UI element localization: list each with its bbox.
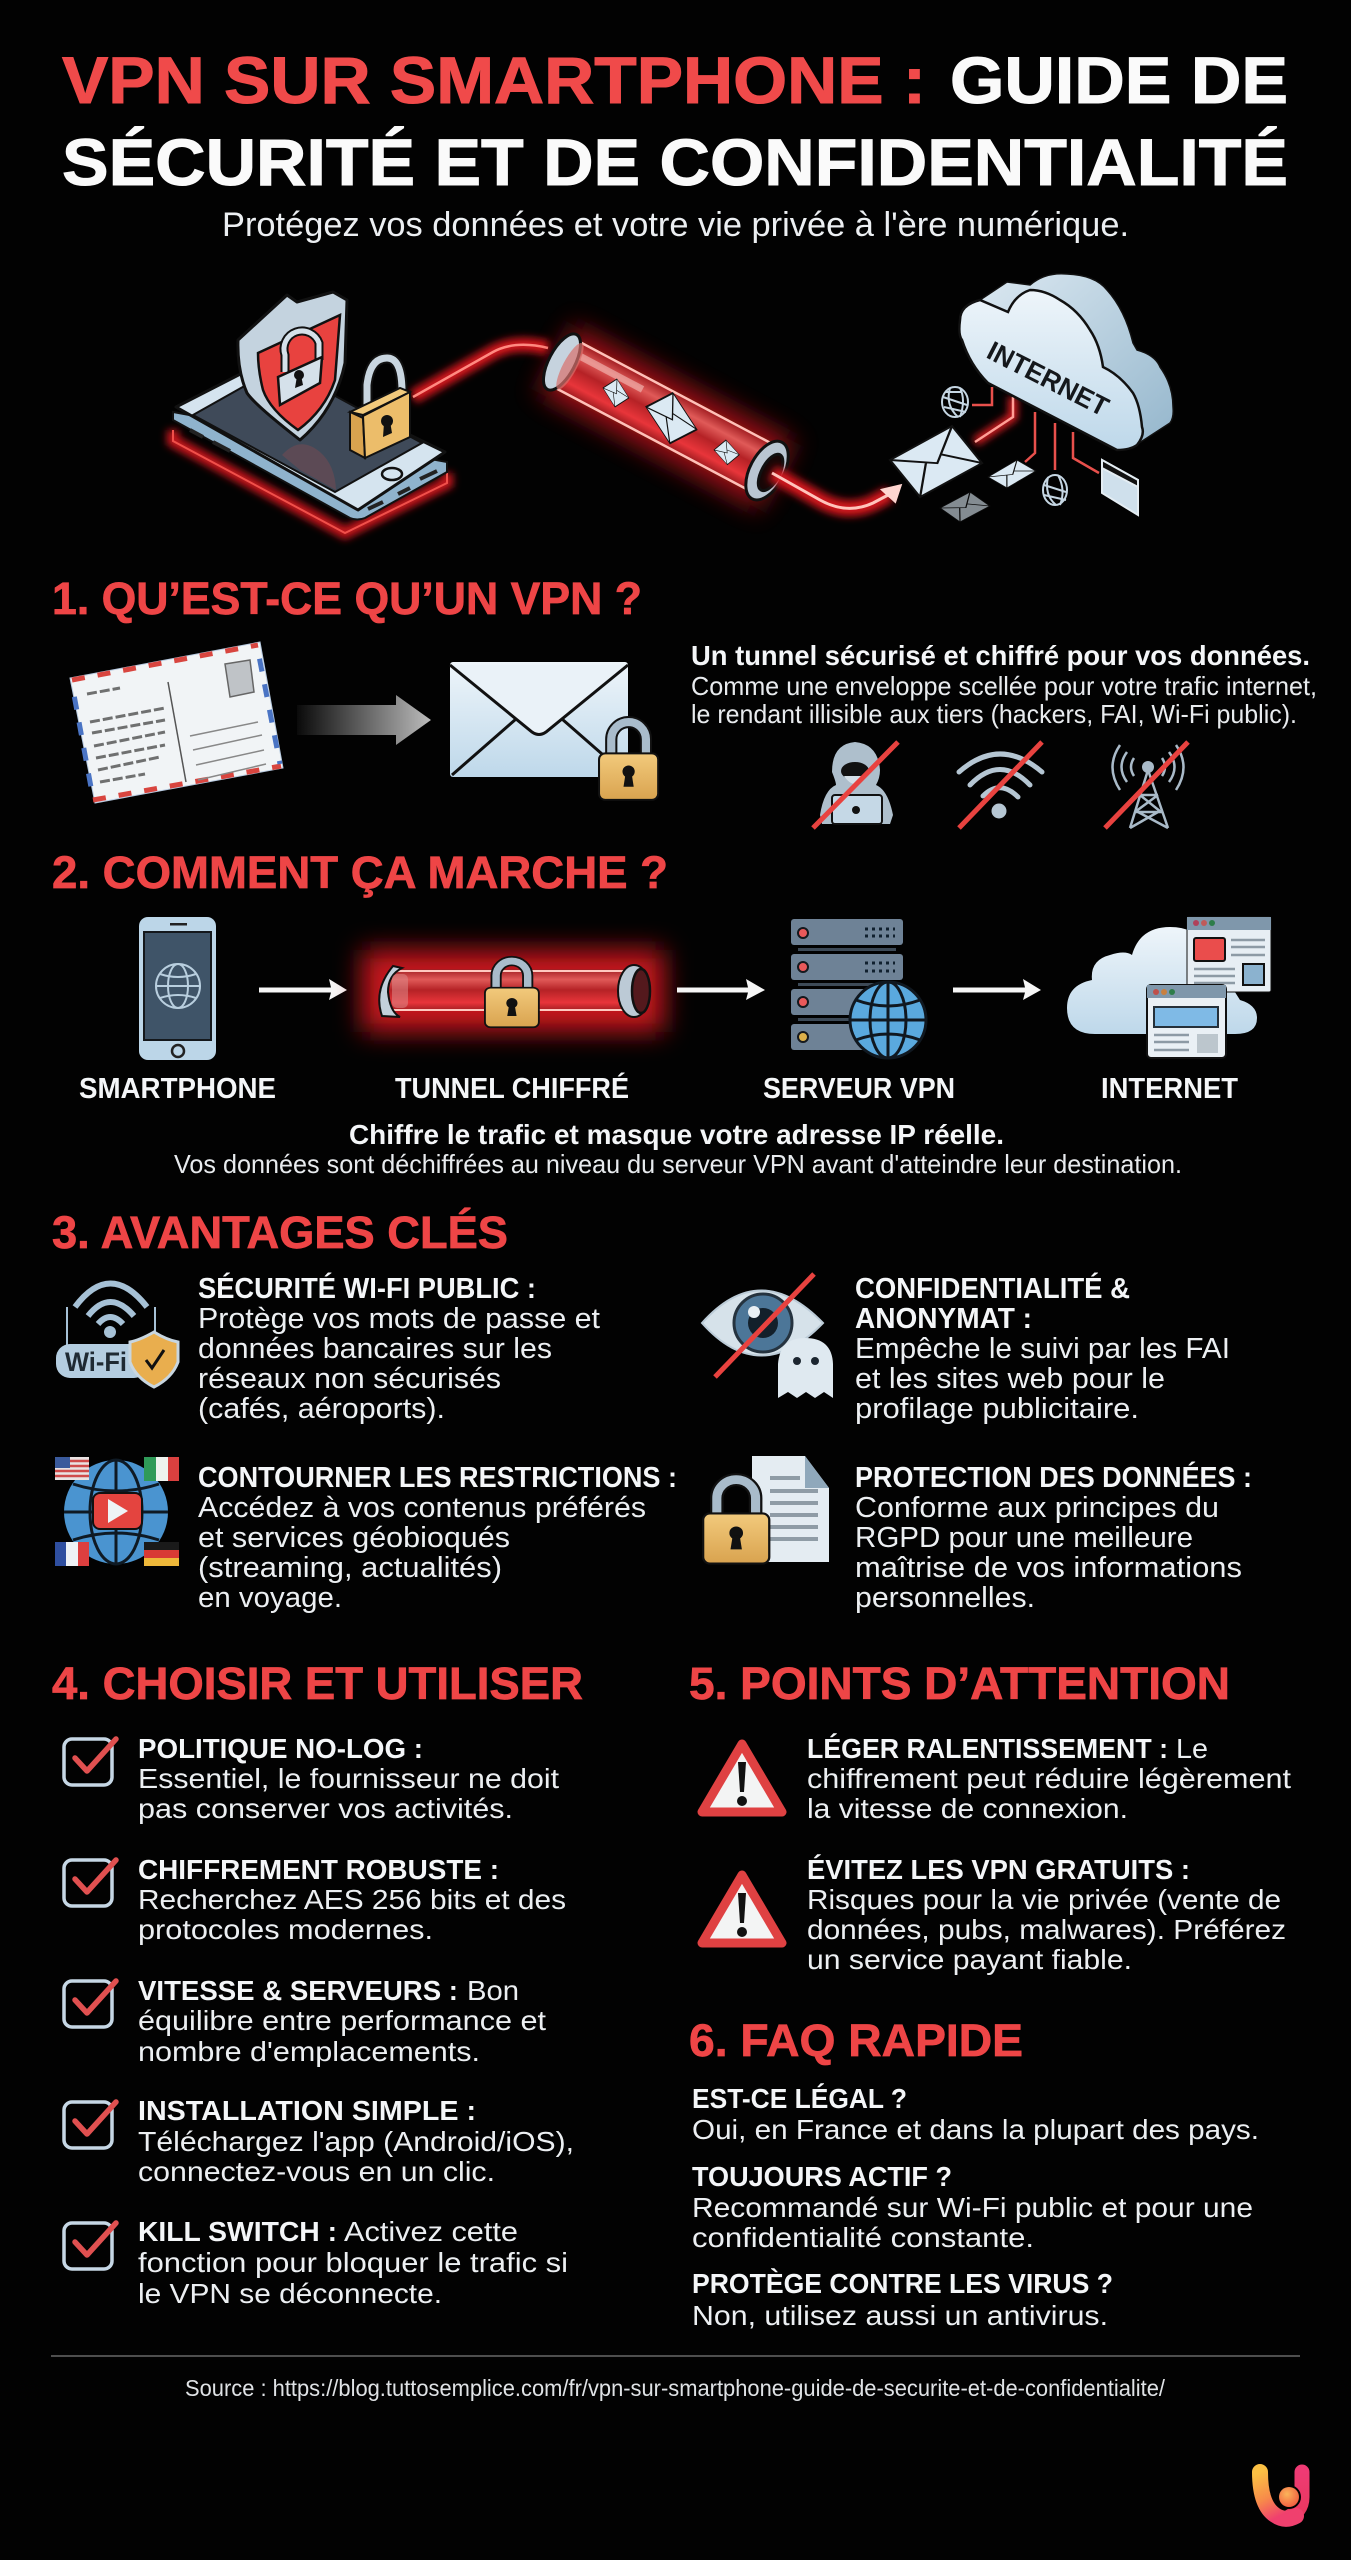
benefit: confidentiality and anonymity bbox=[855, 1271, 1230, 1425]
text: what is a VPN: Un tunnel sécurisé et chiffré pour vos données. bbox=[691, 640, 1310, 671]
warning: avoid free VPNs bbox=[702, 1854, 1286, 1975]
benefit: data protection: personnelles. bbox=[855, 1582, 1035, 1614]
benefit: public wifi security: Protège vos mots de passe et bbox=[198, 1303, 600, 1335]
benefit: confidentiality and anonymity: CONFIDENTIALITÉ & bbox=[855, 1271, 1130, 1305]
title: SÉCURITÉ ET DE CONFIDENTIALITÉ bbox=[62, 125, 1288, 199]
text: how it works bbox=[174, 1119, 1182, 1179]
checklist: kill switch: fonction pour bloquer le trafic si bbox=[138, 2247, 568, 2278]
heading: section 3: 3. AVANTAGES CLÉS bbox=[52, 1207, 508, 1258]
title bbox=[62, 43, 1288, 199]
checklist: no-log policy: pas conserver vos activités. bbox=[138, 1793, 513, 1824]
hero illustration: VPN tunnel from smartphone to internet bbox=[173, 274, 1173, 533]
FAQ: always on: Recommandé sur Wi-Fi public et pour une bbox=[692, 2192, 1253, 2223]
heading: section 2: 2. COMMENT ÇA MARCHE ? bbox=[52, 847, 668, 898]
FAQ: viruses bbox=[692, 2268, 1113, 2331]
icon: gold padlock bbox=[350, 358, 410, 458]
icon: shield with padlock bbox=[238, 292, 347, 440]
Germany flag bbox=[144, 1542, 179, 1566]
browser window front bbox=[1147, 985, 1226, 1058]
checklist: kill switch bbox=[64, 2216, 568, 2309]
step labels: SMARTPHONE bbox=[79, 1073, 276, 1105]
text: what is a VPN: Comme une enveloppe scellée pour votre trafic internet, bbox=[691, 671, 1317, 701]
text: what is a VPN bbox=[691, 640, 1317, 729]
icon: hacker crossed out bbox=[813, 742, 898, 828]
benefit: public wifi security: SÉCURITÉ WI-FI PUBLIC : bbox=[198, 1271, 536, 1305]
checklist: kill switch: le VPN se déconnecte. bbox=[138, 2278, 442, 2309]
benefit: bypass restrictions bbox=[198, 1462, 677, 1614]
icon: smartphone bbox=[139, 917, 216, 1060]
heading: section 6: 6. FAQ RAPIDE bbox=[689, 2015, 1023, 2066]
checklist: robust encryption: Recherchez AES 256 bits et des bbox=[138, 1884, 566, 1915]
logo bbox=[1260, 2472, 1302, 2519]
FAQ: viruses: PROTÈGE CONTRE LES VIRUS ? bbox=[692, 2268, 1113, 2299]
text: what is a VPN: le rendant illisible aux tiers (hackers, FAI, Wi-Fi public). bbox=[691, 699, 1297, 729]
icon: public wifi with shield bbox=[56, 1284, 178, 1387]
warning: slight slowdown bbox=[702, 1733, 1291, 1824]
icon: antenna tower crossed out bbox=[1105, 742, 1188, 828]
benefit: public wifi security: (cafés, aéroports). bbox=[198, 1393, 445, 1425]
benefit: data protection: Conforme aux principes du bbox=[855, 1492, 1219, 1524]
checklist: kill switch: KILL SWITCH : bbox=[138, 2216, 337, 2247]
icon: wifi crossed out bbox=[959, 742, 1042, 828]
checklist: speed and servers: Bon bbox=[467, 1975, 519, 2006]
FAQ: legal: Oui, en France et dans la plupart des pays. bbox=[692, 2114, 1259, 2145]
floating envelopes bbox=[890, 426, 1036, 522]
checklist: simple installation: Téléchargez l'app (Android/iOS), bbox=[138, 2126, 574, 2157]
benefit: confidentiality and anonymity: profilage publicitaire. bbox=[855, 1393, 1139, 1425]
heading: section 1: 1. QU’EST-CE QU’UN VPN ? bbox=[52, 573, 642, 624]
benefit: bypass restrictions: Accédez à vos contenus préférés bbox=[198, 1492, 646, 1524]
browser window back bbox=[1187, 917, 1271, 992]
step labels: INTERNET bbox=[1101, 1073, 1238, 1105]
icon: eye crossed out with ghost bbox=[702, 1274, 833, 1398]
checklist: no-log policy: POLITIQUE NO-LOG : bbox=[138, 1733, 423, 1764]
checklist: no-log policy: Essentiel, le fournisseur ne doit bbox=[138, 1763, 559, 1794]
US flag bbox=[55, 1457, 89, 1480]
checklist: simple installation: INSTALLATION SIMPLE : bbox=[138, 2095, 476, 2126]
checklist: simple installation bbox=[64, 2095, 574, 2187]
checklist: robust encryption: protocoles modernes. bbox=[138, 1914, 433, 1945]
checklist: robust encryption: CHIFFREMENT ROBUSTE : bbox=[138, 1854, 499, 1885]
cloud label: INTERNET bbox=[982, 336, 1114, 422]
FAQ: always on: confidentialité constante. bbox=[692, 2222, 1034, 2253]
warning: avoid free VPNs: un service payant fiable. bbox=[807, 1944, 1132, 1975]
benefit: data protection: maîtrise de vos informations bbox=[855, 1552, 1242, 1584]
arrow: tunnel to server bbox=[677, 979, 765, 1000]
icon: postcard bbox=[70, 642, 283, 803]
icon: internet cloud bbox=[959, 274, 1173, 450]
envelopes inside tunnel bbox=[603, 379, 739, 465]
neon base under phone bbox=[173, 430, 447, 533]
neon link phone to tunnel bbox=[413, 345, 548, 397]
checklist: simple installation: connectez-vous en un clic. bbox=[138, 2156, 495, 2187]
arrow: server to internet bbox=[953, 979, 1041, 1000]
warning: avoid free VPNs: ÉVITEZ LES VPN GRATUITS : bbox=[807, 1854, 1190, 1885]
text: how it works: Vos données sont déchiffrées au niveau du serveur VPN avant d'atteindre leur destination. bbox=[174, 1149, 1182, 1179]
postcard scribbled text bbox=[87, 688, 165, 782]
benefit: public wifi security: données bancaires sur les bbox=[198, 1333, 552, 1365]
warning: slight slowdown: LÉGER RALENTISSEMENT : bbox=[807, 1733, 1168, 1764]
connectors from cloud bbox=[972, 387, 1099, 473]
benefit: data protection: PROTECTION DES DONNÉES : bbox=[855, 1460, 1252, 1494]
France flag bbox=[55, 1542, 89, 1566]
subtitle: Protégez vos données et votre vie privée à l'ère numérique. bbox=[222, 206, 1129, 244]
benefit: bypass restrictions: et services géobioqués bbox=[198, 1522, 510, 1554]
checklist: speed and servers bbox=[64, 1975, 546, 2067]
benefit: bypass restrictions: CONTOURNER LES RESTRICTIONS : bbox=[198, 1462, 677, 1494]
checklist: speed and servers: équilibre entre performance et bbox=[138, 2005, 546, 2036]
benefit: confidentiality and anonymity: et les sites web pour le bbox=[855, 1363, 1165, 1395]
benefit: data protection: RGPD pour une meilleure bbox=[855, 1522, 1193, 1554]
benefit: confidentiality and anonymity: Empêche le suivi par les FAI bbox=[855, 1333, 1230, 1365]
FAQ: always on bbox=[692, 2161, 1253, 2253]
icon: padlock with document bbox=[703, 1456, 829, 1564]
warning: slight slowdown: Le bbox=[1176, 1733, 1208, 1764]
benefit: bypass restrictions: en voyage. bbox=[198, 1582, 342, 1614]
Italy flag bbox=[144, 1457, 179, 1481]
arrow: smartphone to tunnel bbox=[259, 979, 347, 1000]
icon: sealed envelope with padlock bbox=[450, 662, 658, 800]
FAQ: always on: TOUJOURS ACTIF ? bbox=[692, 2161, 952, 2192]
checklist: speed and servers: nombre d'emplacements. bbox=[138, 2036, 480, 2067]
step labels: TUNNEL CHIFFRÉ bbox=[395, 1071, 629, 1105]
benefit: bypass restrictions: (streaming, actualités) bbox=[198, 1552, 502, 1584]
benefit: public wifi security bbox=[198, 1271, 600, 1425]
FAQ: legal bbox=[692, 2083, 1259, 2145]
step labels: SERVEUR VPN bbox=[763, 1073, 955, 1105]
icon: encrypted tunnel bbox=[362, 950, 664, 1032]
benefit: data protection bbox=[855, 1460, 1252, 1614]
heading: section 5: 5. POINTS D’ATTENTION bbox=[689, 1658, 1230, 1709]
warning: avoid free VPNs: données, pubs, malwares). Préférez bbox=[807, 1914, 1286, 1945]
FAQ: viruses: Non, utilisez aussi un antivirus. bbox=[692, 2300, 1108, 2331]
icon: globe with flags and video bbox=[55, 1457, 179, 1566]
globes and browser bbox=[942, 387, 1138, 515]
arrow: postcard to envelope bbox=[297, 695, 431, 745]
checklist: robust encryption bbox=[64, 1854, 566, 1945]
icon: internet cloud with browser windows bbox=[1067, 917, 1271, 1058]
step labels bbox=[79, 1071, 1238, 1105]
heading: section 4: 4. CHOISIR ET UTILISER bbox=[52, 1658, 583, 1709]
icon: VPN server with globe bbox=[791, 919, 926, 1058]
checklist: no-log policy bbox=[64, 1733, 559, 1824]
title: VPN SUR SMARTPHONE : bbox=[62, 43, 926, 117]
warning: slight slowdown: la vitesse de connexion. bbox=[807, 1793, 1128, 1824]
warning: avoid free VPNs: Risques pour la vie privée (vente de bbox=[807, 1884, 1281, 1915]
checklist: speed and servers: VITESSE & SERVEURS : bbox=[138, 1975, 458, 2006]
glass tunnel bbox=[533, 322, 800, 512]
benefit: public wifi security: réseaux non sécurisés bbox=[198, 1363, 501, 1395]
icon: isometric smartphone bbox=[173, 363, 447, 520]
source line: Source : https://blog.tuttosemplice.com/fr/vpn-sur-smartphone-guide-de-securite-et-de-confidentialite/ bbox=[185, 2375, 1166, 2401]
warning: slight slowdown: chiffrement peut réduire légèrement bbox=[807, 1763, 1291, 1794]
neon arrow out of tunnel bbox=[772, 473, 900, 508]
benefit: confidentiality and anonymity: ANONYMAT : bbox=[855, 1303, 1032, 1335]
checklist: kill switch: Activez cette bbox=[344, 2216, 518, 2247]
text: how it works: Chiffre le trafic et masque votre adresse IP réelle. bbox=[349, 1119, 1004, 1150]
title: GUIDE DE bbox=[950, 43, 1288, 117]
FAQ: legal: EST-CE LÉGAL ? bbox=[692, 2083, 907, 2114]
pill label: Wi-Fi bbox=[65, 1347, 127, 1377]
